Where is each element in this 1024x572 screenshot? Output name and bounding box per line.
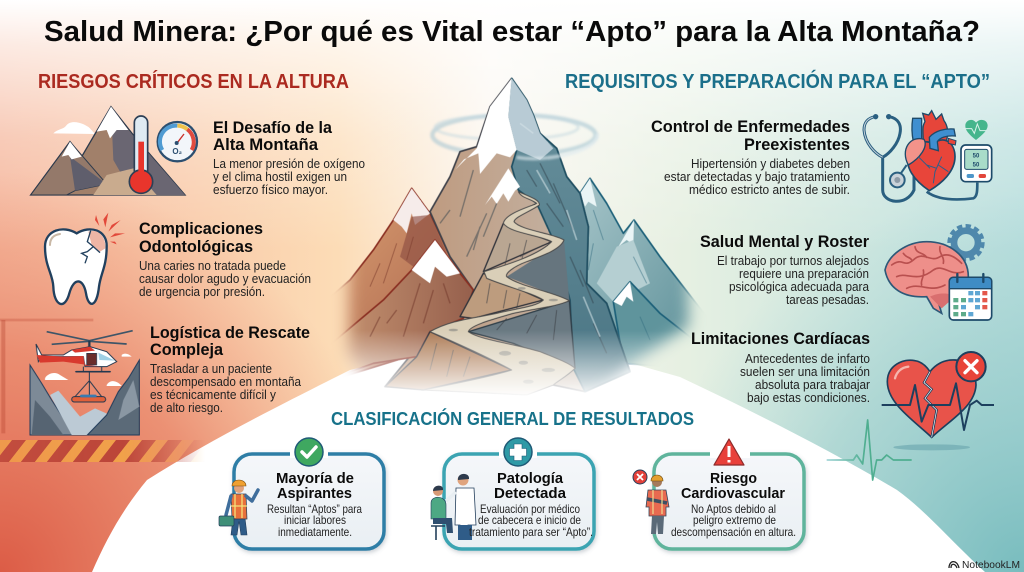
icon: ECG trace (827, 420, 912, 480)
text: patología (469, 502, 593, 539)
heading: salud mental: Salud Mental y Roster (700, 232, 869, 251)
text: complicaciones: de urgencia por presión. (139, 284, 265, 299)
heading: requisitos: REQUISITOS Y PREPARACIÓN PARA EL “APTO” (565, 69, 990, 93)
text: logística: es técnicamente difícil y (150, 387, 276, 402)
heading: mayoría: Mayoría de (276, 470, 354, 487)
panel: desafío de la alta montaña (31, 107, 365, 197)
heading: patología: Detectada (494, 485, 567, 502)
heading: riesgo (681, 470, 785, 502)
heading: control de enfermedades: Control de Enfermedades (651, 117, 850, 136)
heading: logística (150, 323, 310, 359)
heading: patología: Patología (497, 470, 564, 487)
central mountain illustration (336, 78, 700, 395)
card: patología detectada (431, 438, 594, 549)
heading: control de enfermedades (651, 117, 850, 154)
text: salud mental (717, 253, 870, 307)
heading: mayoría (276, 470, 354, 502)
text: salud mental: El trabajo por turnos alejados (717, 253, 869, 268)
decorative hazard stripes (0, 440, 205, 462)
icon: brain, gear and calendar (885, 226, 992, 320)
heading: clasificación general: CLASIFICACIÓN GENERAL DE RESULTADOS (331, 408, 694, 429)
heading: limitaciones: Limitaciones Cardíacas (691, 329, 870, 348)
heading: logística: Logística de Rescate (150, 323, 310, 342)
text: complicaciones: causar dolor agudo y evacuación (139, 271, 311, 286)
card: riesgo cardiovascular (633, 439, 804, 549)
text: el desafío: esfuerzo físico mayor. (213, 182, 328, 197)
panel: logística de rescate (0, 320, 310, 462)
text: riesgo: No Aptos debido al (691, 502, 776, 516)
heading: el desafío: El Desafío de la (213, 118, 333, 137)
text: mayoría (267, 502, 362, 539)
text: complicaciones: Una caries no tratada puede (139, 258, 286, 273)
heading: complicaciones (139, 219, 263, 256)
panel: limitaciones cardíacas (691, 329, 994, 480)
heading: mayoría: Aspirantes (277, 485, 352, 502)
icon: warning triangle (714, 439, 744, 465)
card: mayoría de aspirantes (219, 438, 384, 549)
text: logística (150, 361, 302, 415)
text: logística: descompensado en montaña (150, 374, 302, 389)
heading: el desafío: Alta Montaña (213, 135, 319, 154)
text: el desafío: La menor presión de oxígeno (213, 156, 365, 171)
text: mayoría: Resultan “Aptos” para (267, 502, 362, 516)
text: control: médico estricto antes de subir. (689, 182, 850, 197)
text: complicaciones (139, 258, 311, 299)
heading: riesgos críticos: RIESGOS CRÍTICOS EN LA ALTURA (38, 70, 349, 93)
text: mayoría: iniciar labores (284, 513, 346, 527)
title: Salud Minera: ¿Por qué es Vital estar “Apto” para la Alta Montaña? (44, 16, 980, 48)
text: salud mental: requiere una preparación (739, 266, 869, 281)
panel: control de enfermedades (651, 111, 992, 201)
heading: control de enfermedades: Preexistentes (744, 135, 850, 154)
heading: patología (494, 470, 567, 502)
text: logística: de alto riesgo. (150, 400, 223, 415)
heading: complicaciones: Complicaciones (139, 219, 263, 238)
icon: worker with red X (633, 470, 669, 534)
icon: rescue helicopter in canyon (0, 320, 139, 435)
text: patología: Evaluación por médico (480, 502, 580, 516)
NotebookLM watermark: NotebookLM (962, 560, 1020, 571)
panel: complicaciones odontológicas (45, 213, 311, 304)
text: el desafío (213, 156, 365, 197)
icon: stethoscope, heart and pressure monitor: 50 (973, 153, 980, 159)
panel: salud mental y roster (700, 226, 992, 320)
text: mayoría: inmediatamente. (278, 525, 352, 539)
text: control: estar detectadas y bajo tratamiento (664, 169, 850, 184)
icon: stethoscope, heart and pressure monitor (864, 111, 992, 201)
text: riesgo: peligro extremo de (693, 513, 776, 527)
icon: worker with toolbox (219, 480, 258, 535)
heading: riesgo: Riesgo (710, 470, 757, 487)
text: limitaciones: suelen ser una limitación (740, 364, 870, 379)
text: riesgo (671, 502, 796, 539)
text: logística: Trasladar a un paciente (150, 361, 272, 376)
text: control: Hipertensión y diabetes deben (691, 156, 850, 171)
text: patología: de cabecera e inicio de (478, 513, 581, 527)
text: limitaciones: Antecedentes de infarto (745, 351, 870, 366)
text: salud mental: tareas pesadas. (786, 292, 869, 307)
text: patología: tratamiento para ser “Apto”. (469, 525, 593, 539)
icon: green check (295, 438, 323, 466)
heading: complicaciones: Odontológicas (139, 237, 253, 256)
icon: cracked tooth (45, 213, 125, 304)
icon: stethoscope, heart and pressure monitor: 50 (973, 162, 980, 168)
icon: mountain, thermometer and oxygen gauge: O₂ (172, 147, 183, 156)
heading: logística: Compleja (150, 340, 224, 359)
text: limitaciones: absoluta para trabajar (755, 377, 871, 392)
icon: mountain, thermometer and oxygen gauge (31, 107, 197, 195)
text: limitaciones (740, 351, 871, 405)
icon: medical cross (504, 438, 532, 466)
text: limitaciones: bajo estas condiciones. (747, 390, 870, 405)
icon: broken heart with ECG (882, 352, 994, 450)
text: riesgo: descompensación en altura. (671, 525, 796, 539)
icon: doctor and patient (431, 474, 476, 540)
text: salud mental: psicológica adecuada para (729, 279, 870, 294)
text: el desafío: y el clima hostil exigen un (213, 169, 347, 184)
heading: el desafío (213, 118, 333, 154)
text: control (664, 156, 850, 197)
heading: riesgo: Cardiovascular (681, 485, 785, 502)
